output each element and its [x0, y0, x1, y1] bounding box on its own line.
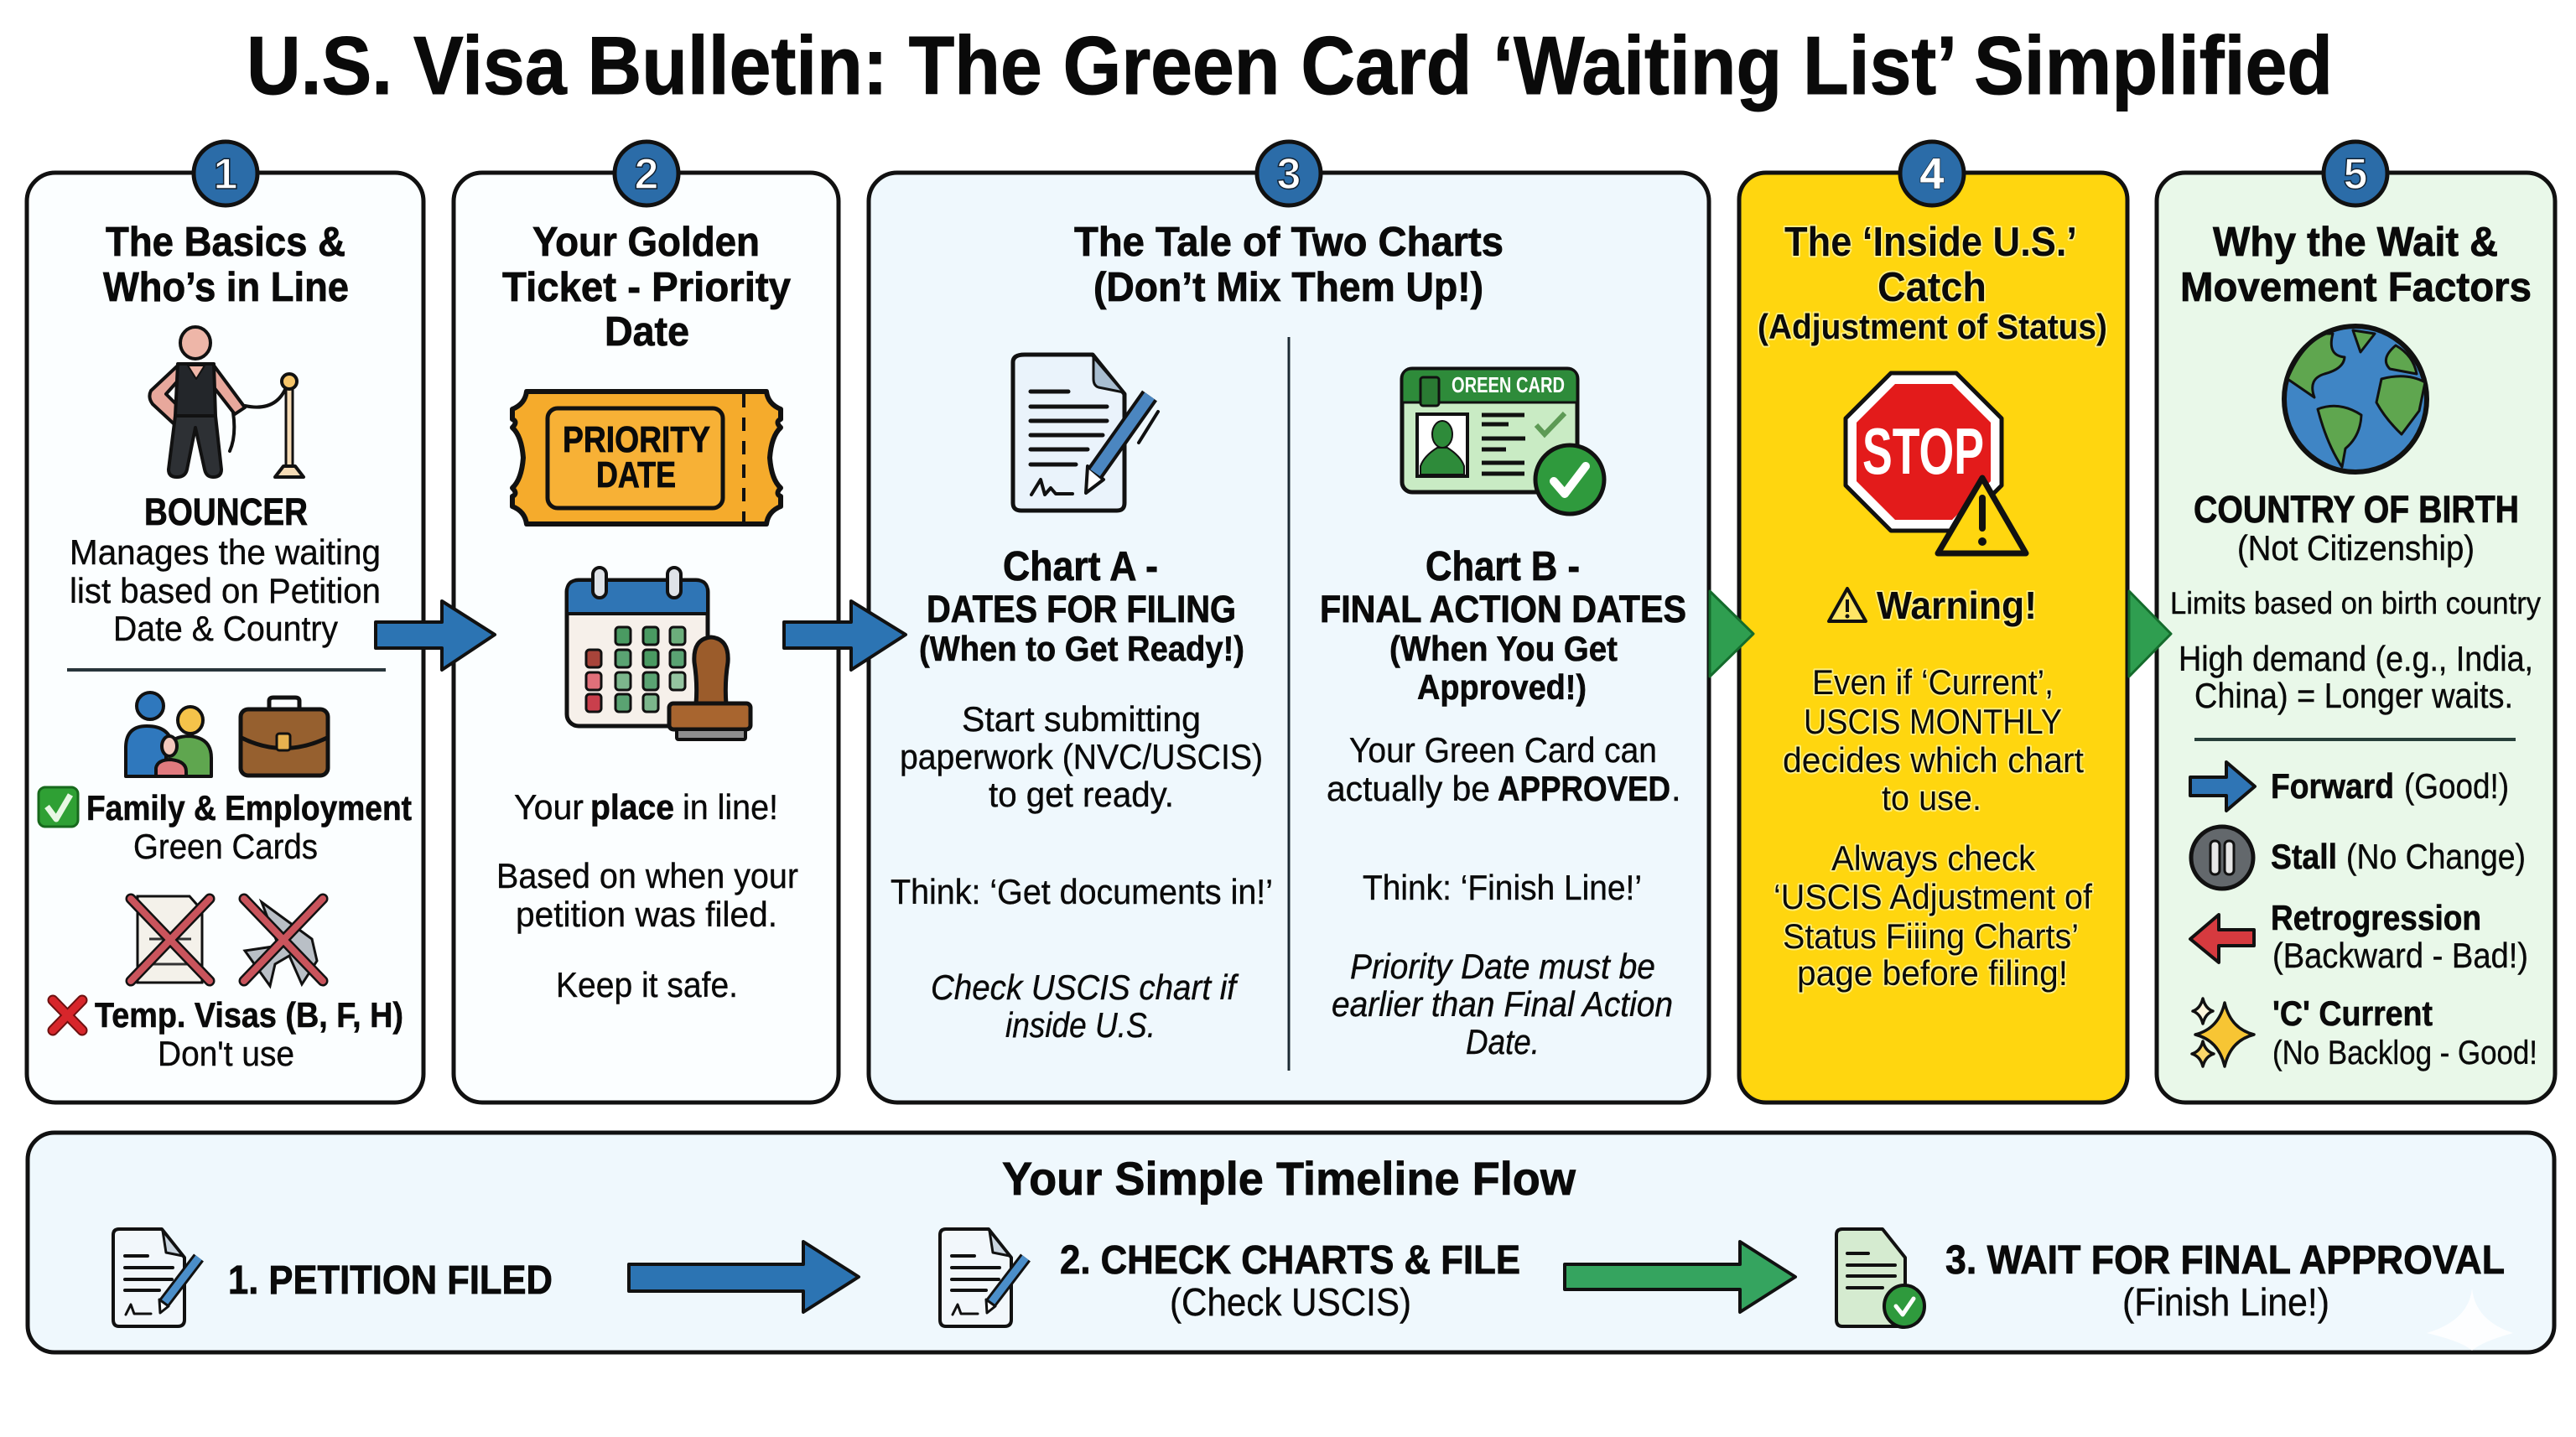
column: chart b final action dates: Your Green Card can	[1349, 730, 1657, 770]
icon: briefcase	[241, 698, 328, 776]
legend: forward: (Good!)	[2404, 766, 2509, 806]
text: always check: Status Fiiing Charts’	[1783, 916, 2079, 956]
column: chart b final action dates: Think: ‘Finish Line!’	[1363, 868, 1642, 907]
legend: current: (No Backlog - Good!	[2272, 1035, 2537, 1071]
text: chart decision: USCIS MONTHLY	[1804, 702, 2062, 741]
panel 4: inside U.S. catch	[1739, 142, 2127, 1102]
heading: golden ticket: Your Golden	[532, 220, 760, 265]
warning label: Warning!	[1877, 584, 2037, 627]
column: chart a dates for filing: (When to Get Ready!)	[919, 629, 1244, 668]
column: chart b final action dates	[1320, 544, 1686, 1061]
text: chart decision: Even if ‘Current’,	[1812, 662, 2054, 702]
icon: backward arrow	[2190, 915, 2254, 962]
icon: green check box	[39, 787, 78, 827]
text: always check: Always check	[1831, 838, 2036, 878]
text: country of birth	[2170, 488, 2541, 715]
column: chart a dates for filing: Think: ‘Get documents in!’	[891, 872, 1273, 911]
icon: bouncer with rope post	[149, 327, 304, 477]
arrow: step 2 to step 3	[1565, 1242, 1795, 1312]
icon: document and pen	[1013, 355, 1158, 511]
text: always check: page before filing!	[1797, 953, 2068, 993]
legend: current	[2192, 993, 2537, 1071]
step badge 4	[1900, 142, 1964, 205]
step 2: check charts and file: 2. CHECK CHARTS & FILE	[1060, 1238, 1520, 1283]
title: U.S. Visa Bulletin: The Green Card ‘Waiting List’ Simplified	[247, 19, 2333, 112]
icon: priority date ticket: DATE	[596, 454, 676, 495]
arrow: panel 3 to panel 4	[1710, 591, 1753, 677]
column: chart a dates for filing: DATES FOR FILING	[927, 588, 1236, 630]
column: chart a dates for filing	[891, 544, 1273, 1045]
column: chart b final action dates: APPROVED	[1498, 769, 1670, 808]
text: your place in line: place	[590, 787, 674, 827]
text: family and employment: Green Cards	[133, 827, 318, 866]
icon: family	[126, 693, 211, 776]
icon: crossed out document	[131, 896, 210, 983]
legend: current: 'C' Current	[2272, 993, 2433, 1033]
heading: the basics: Who’s in Line	[103, 265, 349, 310]
heading: tale of two charts: (Don’t Mix Them Up!)	[1093, 265, 1483, 310]
text: bouncer: Manages the waiting	[70, 532, 381, 572]
icon: document and pen	[113, 1229, 199, 1326]
step badge 2: 2	[635, 150, 658, 199]
step badge 5	[2324, 142, 2387, 205]
icon: red x	[53, 1000, 82, 1030]
text: your place in line: Keep it safe.	[556, 965, 738, 1004]
heading: the basics: The Basics &	[106, 220, 345, 265]
heading: inside U.S. catch: (Adjustment of Status)	[1758, 307, 2107, 346]
text: country of birth: High demand (e.g., India,	[2179, 639, 2533, 678]
text: country of birth: COUNTRY OF BIRTH	[2194, 488, 2519, 531]
text: temporary visas: Temp. Visas (B, F, H)	[95, 995, 403, 1035]
text: country of birth: (Not Citizenship)	[2237, 528, 2475, 568]
heading: the basics	[103, 220, 349, 310]
icon: priority date ticket	[512, 392, 781, 524]
text: always check	[1774, 838, 2092, 993]
text: family and employment: Family & Employment	[86, 788, 412, 827]
icon: green card with check	[1402, 369, 1604, 514]
panel: simple timeline flow	[28, 1133, 2554, 1352]
icon: small warning triangle	[1829, 589, 1866, 621]
column: chart b final action dates: actually be	[1327, 769, 1490, 808]
step 1: petition filed	[113, 1229, 553, 1326]
arrow: panel 1 to panel 2	[376, 601, 495, 670]
legend: retrogression	[2190, 898, 2528, 975]
text: your place in line: petition was filed.	[516, 895, 777, 934]
step badge 3: 3	[1277, 150, 1301, 199]
text: family and employment	[39, 787, 412, 866]
step badge 5: 5	[2344, 150, 2367, 199]
text: your place in line: in line!	[683, 787, 778, 827]
text: country of birth: Limits based on birth country	[2170, 586, 2541, 620]
text: bouncer: list based on Petition	[70, 571, 381, 610]
column: chart a dates for filing: Start submitting	[962, 699, 1201, 739]
arrow: panel 2 to panel 3	[784, 601, 906, 670]
legend: forward: Forward	[2271, 766, 2394, 806]
arrow: panel 4 to panel 5	[2129, 591, 2171, 677]
text: always check: ‘USCIS Adjustment of	[1774, 877, 2092, 916]
column: chart b final action dates: FINAL ACTION DATES	[1320, 588, 1686, 630]
text: bouncer	[70, 490, 381, 648]
icon: priority date ticket: PRIORITY	[563, 419, 710, 460]
step 2: check charts and file: (Check USCIS)	[1170, 1280, 1411, 1324]
heading: tale of two charts: The Tale of Two Charts	[1074, 220, 1504, 265]
icon: stop sign with warning triangle	[1846, 373, 2026, 553]
column: chart b final action dates: (When You Get	[1389, 629, 1618, 668]
heading: inside U.S. catch	[1758, 220, 2107, 346]
text: chart decision: to use.	[1882, 778, 1981, 817]
column: chart b final action dates: Priority Date must be	[1350, 947, 1655, 986]
column: chart b final action dates: Chart B -	[1426, 544, 1580, 589]
column: chart b final action dates: .	[1671, 769, 1681, 808]
icon: calendar with stamp	[567, 568, 750, 739]
step badge 3	[1257, 142, 1321, 205]
column: chart a dates for filing: inside U.S.	[1005, 1005, 1156, 1045]
step 3: wait for final approval	[1836, 1229, 2505, 1327]
icon: document and pen	[940, 1229, 1026, 1326]
text: your place in line	[496, 787, 798, 1004]
legend: retrogression: Retrogression	[2271, 898, 2481, 937]
panel 1: the basics and who's in line	[27, 142, 423, 1102]
column: chart a dates for filing: paperwork (NVC/USCIS)	[900, 737, 1263, 776]
legend: stall: Stall	[2271, 837, 2337, 876]
heading: inside U.S. catch: Catch	[1877, 265, 1987, 310]
text: temporary visas: Don't use	[158, 1034, 294, 1073]
column: chart a dates for filing: Chart A -	[1003, 544, 1158, 589]
icon: forward arrow	[2190, 762, 2255, 811]
icon: green card with check: OREEN CARD	[1452, 372, 1565, 397]
column: chart b final action dates: earlier than Final Action	[1332, 984, 1673, 1024]
heading: inside U.S. catch: The ‘Inside U.S.’	[1784, 220, 2077, 265]
icon: sparkles	[2192, 999, 2254, 1066]
panel 2: golden ticket priority date	[454, 142, 839, 1102]
column: chart a dates for filing: to get ready.	[989, 775, 1174, 814]
column: chart b final action dates: Date.	[1466, 1022, 1540, 1061]
text: chart decision	[1783, 662, 2084, 817]
text: bouncer: BOUNCER	[144, 490, 308, 533]
step 3: wait for final approval: 3. WAIT FOR FINAL APPROVAL	[1945, 1238, 2505, 1283]
heading: golden ticket: Date	[605, 309, 689, 355]
heading: why the wait: Why the Wait &	[2213, 220, 2498, 265]
arrow: step 1 to step 2	[629, 1242, 859, 1312]
icon: document with check	[1836, 1229, 1924, 1327]
icon: globe	[2284, 326, 2427, 472]
text: country of birth: China) = Longer waits.	[2194, 676, 2513, 715]
heading: why the wait: Movement Factors	[2180, 265, 2532, 310]
legend: retrogression: (Backward - Bad!)	[2272, 936, 2528, 975]
legend: stall	[2191, 827, 2526, 889]
legend: stall: (No Change)	[2346, 837, 2526, 876]
text: your place in line: Your	[514, 787, 584, 827]
heading: timeline: Your Simple Timeline Flow	[1002, 1152, 1576, 1205]
icon: crossed out plane	[244, 899, 323, 986]
text: chart decision: decides which chart	[1783, 740, 2084, 780]
icon: stop sign with warning triangle: STOP	[1862, 414, 1984, 488]
heading: tale of two charts	[1074, 220, 1504, 310]
step badge 1	[194, 142, 257, 205]
step 2: check charts and file	[940, 1229, 1520, 1326]
step badge 4: 4	[1920, 150, 1945, 199]
legend: forward	[2190, 762, 2509, 811]
panel 3: tale of two charts	[869, 142, 1709, 1102]
panel 5: why the wait and movement factors	[2157, 142, 2555, 1102]
column: chart a dates for filing: Check USCIS chart if	[931, 968, 1239, 1007]
step 3: wait for final approval: (Finish Line!)	[2122, 1280, 2329, 1324]
text: bouncer: Date & Country	[113, 609, 338, 648]
heading: golden ticket	[502, 220, 791, 355]
text: your place in line: Based on when your	[496, 856, 798, 895]
heading: why the wait	[2180, 220, 2532, 310]
text: temporary visas	[53, 995, 403, 1073]
heading: golden ticket: Ticket - Priority	[502, 265, 791, 310]
column: chart b final action dates: Approved!)	[1417, 667, 1587, 707]
step badge 1: 1	[214, 150, 237, 199]
icon: stall pause	[2191, 827, 2253, 889]
step badge 2	[615, 142, 678, 205]
step 1: petition filed: 1. PETITION FILED	[228, 1258, 553, 1303]
